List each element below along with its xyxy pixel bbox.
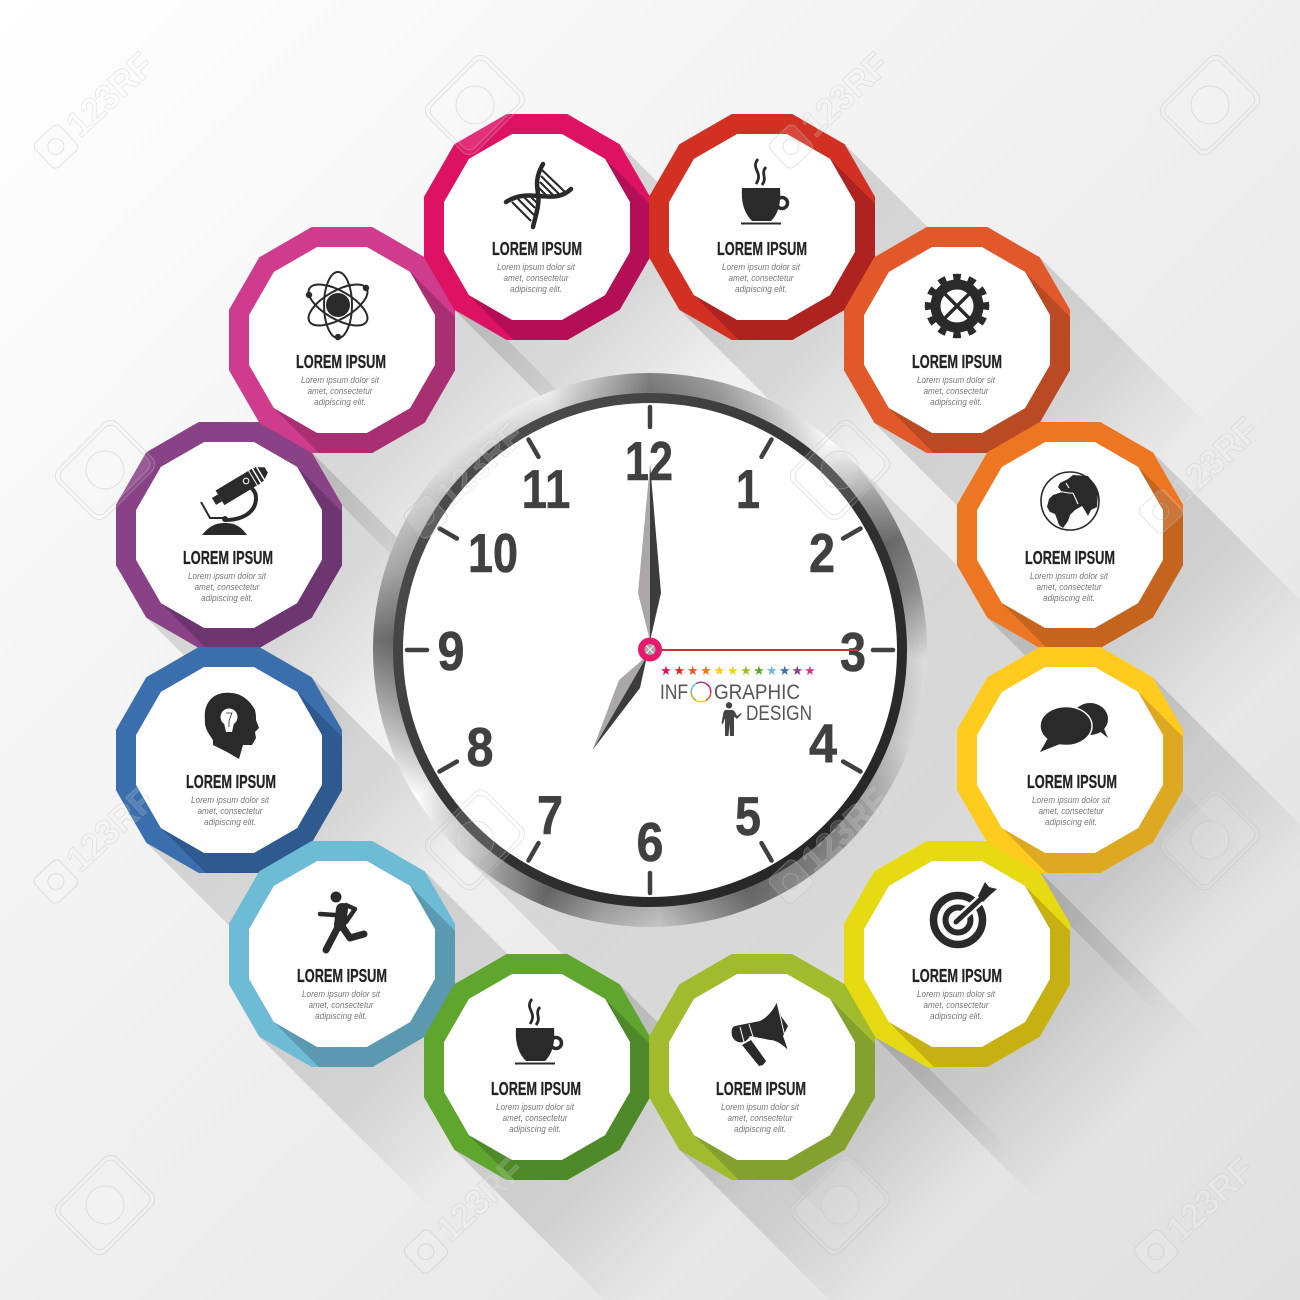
body text: adipiscing elit.: [314, 397, 366, 408]
body text: Lorem ipsum dolor sit: [301, 375, 379, 386]
body text: [721, 1102, 799, 1135]
ring: [957, 422, 1300, 785]
body text: Lorem ipsum dolor sit: [302, 989, 380, 1000]
icon: dna helix: [506, 164, 571, 227]
rainbow stars: ★: [740, 664, 752, 679]
wordmark: [660, 681, 812, 725]
body text: adipiscing elit.: [315, 1011, 367, 1022]
body text: adipiscing elit.: [1043, 593, 1095, 604]
body text: [1032, 795, 1110, 828]
panel: coffee bottom: [424, 954, 787, 1300]
body text: [917, 375, 995, 408]
body text: amet, consectetur: [308, 1000, 374, 1011]
rainbow stars: ★: [673, 664, 685, 679]
icon: head with bulb: [205, 693, 259, 759]
body text: adipiscing elit.: [201, 593, 253, 604]
panel: runner: [229, 841, 592, 1204]
body text: adipiscing elit.: [204, 817, 256, 828]
hour hand: [592, 656, 647, 750]
ring: [229, 841, 592, 1204]
stock watermarks: 123RF: [428, 414, 532, 515]
clock numbers: [438, 430, 866, 873]
ring: [649, 114, 1012, 477]
rainbow stars: ★: [687, 664, 699, 679]
rainbow stars: ★: [791, 664, 803, 679]
icon: atom: [302, 272, 374, 340]
stock watermarks: 123RF: [58, 779, 162, 880]
heading: LOREM IPSUM: [912, 352, 1002, 372]
ring: [844, 227, 1207, 590]
ring: [424, 114, 787, 477]
body text: Lorem ipsum dolor sit: [722, 262, 800, 273]
ring: [229, 227, 592, 590]
body text: [496, 1102, 574, 1135]
body text: Lorem ipsum dolor sit: [497, 262, 575, 273]
body text: amet, consectetur: [504, 273, 569, 284]
icon: target: [934, 882, 997, 944]
body text: amet, consectetur: [308, 386, 373, 397]
stock watermarks: 123RF: [58, 44, 162, 145]
body text: amet, consectetur: [1036, 582, 1102, 593]
body text: [301, 375, 379, 408]
clock numbers: 5: [735, 785, 761, 847]
body text: amet, consectetur: [728, 1113, 793, 1124]
body text: adipiscing elit.: [734, 1124, 786, 1135]
body text: adipiscing elit.: [510, 284, 562, 295]
heading: LOREM IPSUM: [1025, 548, 1115, 568]
ring: [649, 954, 1012, 1300]
icon: presenter: [722, 702, 742, 736]
stock watermarks: 123RF: [428, 1149, 532, 1250]
heading: LOREM IPSUM: [716, 1079, 806, 1099]
heading: LOREM IPSUM: [492, 239, 582, 259]
clock numbers: 6: [636, 811, 664, 873]
rainbow stars: ★: [753, 664, 765, 679]
heading: LOREM IPSUM: [186, 772, 276, 792]
ring: [844, 841, 1207, 1204]
clock face: [398, 398, 902, 902]
body text: [722, 262, 800, 295]
heading: LOREM IPSUM: [183, 548, 273, 568]
panel: dna: [424, 114, 787, 477]
clock metal rim: [373, 373, 927, 927]
panel: megaphone: [649, 954, 1012, 1300]
clock numbers: 8: [466, 716, 494, 778]
panel: target: [844, 841, 1207, 1204]
rainbow stars: ★: [727, 664, 739, 679]
body text: Lorem ipsum dolor sit: [917, 375, 995, 386]
clock numbers: 7: [537, 784, 563, 846]
body text: amet, consectetur: [198, 806, 263, 817]
body text: Lorem ipsum dolor sit: [191, 795, 269, 806]
panel: coffee top: [649, 114, 1012, 477]
body text: [1030, 571, 1108, 604]
clock numbers: 3: [840, 621, 866, 683]
body text: adipiscing elit.: [735, 284, 787, 295]
clock numbers: 2: [809, 522, 835, 584]
body text: [188, 571, 266, 604]
minute hand: [638, 464, 661, 641]
stock watermarks: 123RF: [1163, 409, 1267, 510]
panel: atom: [229, 227, 592, 590]
heading: LOREM IPSUM: [296, 352, 386, 372]
clock numbers: 12: [625, 430, 673, 492]
stock watermarks: 123RF: [1158, 1149, 1262, 1250]
body text: Lorem ipsum dolor sit: [917, 989, 995, 1000]
icon: megaphone: [732, 1002, 788, 1066]
ring: [116, 647, 479, 1010]
body text: [497, 262, 575, 295]
body text: amet, consectetur: [924, 1000, 989, 1011]
heading: LOREM IPSUM: [912, 966, 1002, 986]
stock watermarks: 123RF: [793, 779, 897, 880]
body text: adipiscing elit.: [1045, 817, 1097, 828]
rainbow stars: ★: [766, 664, 778, 679]
body text: Lorem ipsum dolor sit: [1030, 571, 1108, 582]
clock hands: [592, 464, 858, 750]
body text: amet, consectetur: [194, 582, 260, 593]
rainbow stars: ★: [660, 664, 672, 679]
logo: infographic design: [660, 664, 816, 736]
body text: amet, consectetur: [728, 273, 794, 284]
body text: [191, 795, 269, 828]
icon: coffee cup: [741, 159, 788, 224]
rainbow stars: ★: [804, 664, 816, 679]
body text: adipiscing elit.: [509, 1124, 561, 1135]
body text: Lorem ipsum dolor sit: [188, 571, 266, 582]
clock numbers: 1: [736, 458, 760, 520]
hub: [638, 638, 662, 662]
body text: Lorem ipsum dolor sit: [496, 1102, 574, 1113]
rainbow stars: ★: [779, 664, 791, 679]
clock numbers: 11: [522, 458, 570, 520]
body text: amet, consectetur: [502, 1113, 568, 1124]
heading: LOREM IPSUM: [491, 1079, 581, 1099]
body text: Lorem ipsum dolor sit: [1032, 795, 1110, 806]
heading: LOREM IPSUM: [297, 966, 387, 986]
heading: LOREM IPSUM: [1027, 772, 1117, 792]
heading: LOREM IPSUM: [717, 239, 807, 259]
icon: runner: [320, 892, 364, 950]
rainbow stars: [660, 664, 816, 679]
body text: amet, consectetur: [924, 386, 989, 397]
rainbow O: [691, 682, 711, 702]
ring: [116, 422, 479, 785]
clock numbers: 9: [438, 620, 464, 682]
wordmark: DESIGN: [746, 702, 812, 725]
panel: chat: [957, 647, 1300, 1010]
rainbow stars: ★: [713, 664, 725, 679]
body text: [917, 989, 995, 1022]
body text: Lorem ipsum dolor sit: [721, 1102, 799, 1113]
clock numbers: 10: [468, 522, 518, 584]
stock watermarks: 123RF: [793, 44, 897, 145]
icon: speech bubbles: [1040, 703, 1108, 752]
icon: globe: [1041, 472, 1099, 530]
icon: coffee cup: [515, 999, 562, 1064]
panel: gear: [844, 227, 1207, 590]
icon: microscope: [201, 463, 271, 535]
panel: microscope: [116, 422, 479, 785]
body text: adipiscing elit.: [930, 397, 982, 408]
ring: [957, 647, 1300, 1010]
second hand: [650, 649, 858, 651]
hour ticks: [407, 407, 893, 893]
body text: adipiscing elit.: [930, 1011, 982, 1022]
wordmark: GRAPHIC: [714, 681, 800, 704]
panel: globe: [957, 422, 1300, 785]
panel: head: [116, 647, 479, 1010]
clock numbers: 4: [809, 712, 837, 774]
ring: [424, 954, 787, 1300]
rainbow stars: ★: [700, 664, 712, 679]
wordmark: INF: [660, 681, 688, 704]
body text: amet, consectetur: [1038, 806, 1104, 817]
icon: gear: [925, 274, 989, 338]
body text: [302, 989, 380, 1022]
